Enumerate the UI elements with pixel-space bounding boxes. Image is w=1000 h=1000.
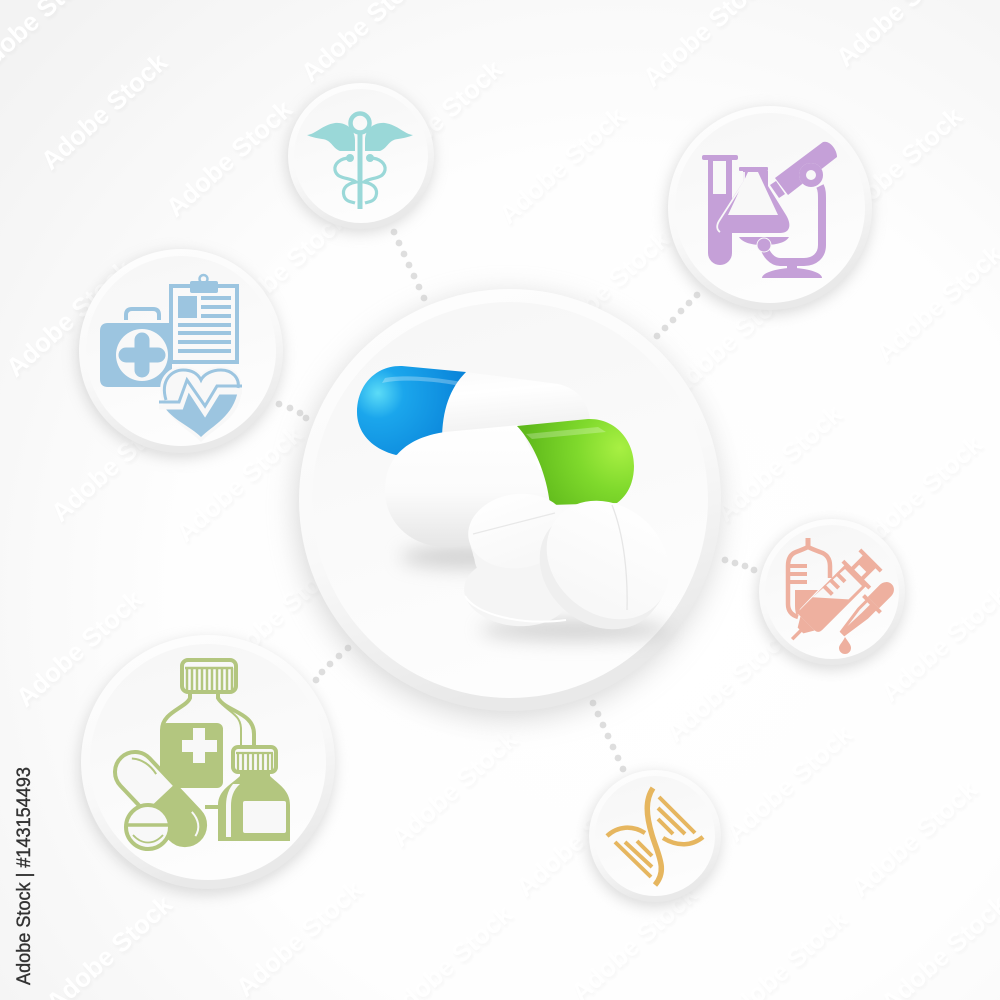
- connector dots: bottles to centre: [313, 645, 351, 683]
- watermark shadow layer: Adobe Stock: [386, 726, 525, 855]
- watermark text layer: Adobe Stock: [537, 224, 675, 353]
- icon: syringe: [779, 547, 884, 652]
- blue and white capsule: [357, 366, 590, 470]
- watermark text layer: Adobe Stock: [10, 584, 148, 713]
- watermark text layer: Adobe Stock: [710, 399, 848, 528]
- icon: dna helix: [607, 788, 703, 885]
- watermark shadow layer: Adobe Stock: [371, 56, 510, 185]
- watermark shadow layer: Adobe Stock: [161, 96, 300, 225]
- watermark shadow layer: Adobe Stock: [831, 103, 970, 232]
- watermark text layer: Adobe Stock: [830, 101, 968, 230]
- icon: infusion bag: [786, 538, 830, 617]
- badge: medical kit: [77, 249, 283, 458]
- icon: large bottle: [161, 660, 254, 807]
- badge: medicine bottles: [79, 635, 335, 895]
- watermark text layer: Adobe Stock: [35, 47, 173, 176]
- watermark shadow layer: Adobe Stock: [1, 256, 140, 385]
- watermark text layer: Adobe Stock: [510, 774, 648, 903]
- watermark text layer: Adobe Stock: [215, 204, 353, 333]
- pill shadows: [400, 545, 670, 641]
- watermark shadow layer: Adobe Stock: [511, 776, 650, 905]
- connector dots: dna to centre: [590, 700, 626, 772]
- watermark shadow layer: Adobe Stock: [11, 586, 150, 715]
- watermark shadow layer: Adobe Stock: [216, 206, 355, 335]
- front tablet: [516, 476, 693, 654]
- watermark shadow layer: Adobe Stock: [36, 49, 175, 178]
- watermark text layer: Adobe Stock: [45, 399, 183, 528]
- icon: small bottle: [218, 747, 290, 841]
- stock id caption: Adobe Stock | #143154493: [13, 767, 35, 985]
- badge: dna: [587, 770, 721, 907]
- watermark text layer: Adobe Stock: [493, 101, 631, 230]
- watermark shadow layer: Adobe Stock: [211, 551, 350, 680]
- watermark text layer: Adobe Stock: [170, 419, 308, 548]
- watermark text layer: Adobe Stock: [160, 94, 298, 223]
- watermark text layer: Adobe Stock: [230, 874, 368, 1000]
- connector dots: microscope to centre: [654, 292, 700, 339]
- icon: first aid case: [100, 309, 190, 387]
- connector dots: caduceus to centre: [391, 229, 427, 301]
- lower back tablet: [461, 554, 573, 630]
- connector dots: syringe to centre: [722, 557, 757, 573]
- watermark shadow layer: Adobe Stock: [711, 401, 850, 530]
- watermark shadow layer: Adobe Stock: [721, 721, 860, 850]
- upper back tablet: [463, 487, 579, 597]
- watermark shadow layer: Adobe Stock: [538, 226, 677, 355]
- badge: caduceus: [286, 83, 434, 233]
- watermark text layer: Adobe Stock: [370, 54, 508, 183]
- watermark text layer: Adobe Stock: [663, 274, 801, 403]
- watermark text layer: Adobe Stock: [850, 429, 988, 558]
- watermark shadow layer: Adobe Stock: [851, 431, 990, 560]
- watermark text layer: Adobe Stock: [720, 719, 858, 848]
- watermark shadow layer: Adobe Stock: [846, 776, 985, 905]
- watermark text layer: Adobe Stock: [845, 774, 983, 903]
- watermark shadow layer: Adobe Stock: [494, 103, 633, 232]
- icon: test tube, flask, microscope: [702, 142, 837, 278]
- watermark text layer: Adobe Stock: [210, 549, 348, 678]
- white and green capsule: [385, 419, 634, 547]
- watermark text layer: Adobe Stock: [660, 619, 798, 748]
- icon: clipboard: [171, 275, 237, 362]
- watermark shadow layer: Adobe Stock: [664, 276, 803, 405]
- watermark text layer: Adobe Stock: [385, 724, 523, 853]
- central disc with pills: [296, 289, 721, 719]
- badge: syringe: [757, 519, 905, 670]
- icon: capsule and tablet: [105, 742, 215, 855]
- connector dots: kit to centre: [276, 401, 309, 421]
- watermark shadow layer: Adobe Stock: [46, 401, 185, 530]
- watermark shadow layer: Adobe Stock: [171, 421, 310, 550]
- watermark shadow layer: Adobe Stock: [661, 621, 800, 750]
- icon: dropper and drop: [835, 576, 900, 654]
- badge: laboratory: [666, 106, 872, 315]
- icon: caduceus: [307, 114, 413, 209]
- icon: heart with pulse: [159, 370, 242, 437]
- watermark text layer: Adobe Stock: [0, 254, 138, 383]
